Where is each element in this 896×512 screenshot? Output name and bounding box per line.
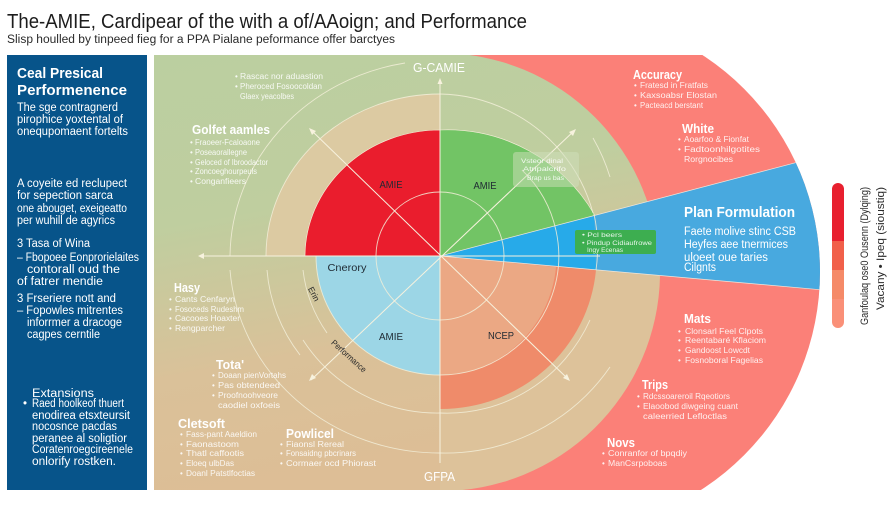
text block: top bullets: • [235,72,238,81]
text block: tota: Pas obtendeed [218,381,280,390]
sidebar list two: 3 Frseriere nott and [17,293,116,305]
text block: accuracy: • [634,91,637,100]
sidebar list one [17,238,139,288]
legend [832,183,887,328]
text block: tota: Proofnoohveore [218,391,279,400]
tan ring right lower [462,271,660,490]
text block: accuracy: • [634,81,637,90]
quadrant labels [328,179,514,343]
sidebar extensions: enodirea etsxteursit [32,410,131,422]
text block: mats: Gandoost Lowcdt [685,346,751,355]
text block: plan formulation: uloeet oue taries [684,252,768,264]
sidebar list one: contorall oud the [27,264,120,276]
text block: tota: • [212,391,215,400]
sidebar list one: – Fbopoee Eonprorielaites [17,252,139,264]
callout: green translucent box: Brap us bas [527,175,565,182]
text block: cletsoft: • [180,459,183,468]
text block: hasy: Fosoceds Rudeshm [175,305,244,314]
text block: golfet aamles: Zoncoeghourpeuls [195,167,257,176]
text block: novs: ManCsrpoboas [608,459,667,468]
text block: mats: • [678,356,681,365]
text block: accuracy [633,67,717,110]
sidebar extensions: Coratenroegcireenele [32,444,133,456]
text block: golfet aamles: Golfet aamles [192,122,270,137]
text block: cletsoft: • [180,449,183,458]
text block: hasy [169,280,244,333]
text block: top bullets: Pheroced Fosoocoldan [240,82,322,91]
text block: mats: Reentabaré Kflaciom [685,336,766,345]
sidebar description: one abouget, exeigeatto [17,203,127,215]
quadrant labels: AMIE [474,180,496,192]
quadrant labels: AMIE [379,331,403,343]
sidebar intro text [17,102,128,138]
curved ring labels: Performance [329,338,369,375]
text block: powlicel: Fiaonsl Rereal [286,440,344,449]
callout: green box: • Pindup Cidiaufrowe [582,240,652,247]
text block: hasy: • [169,314,172,323]
text block: novs: Conranfor of bpqdiy [608,449,687,458]
text block: cletsoft: Doanl Patstlfoctias [186,469,255,478]
text block: top bullets: Glaex yeacolbes [240,92,294,101]
panel: left sidebar [7,55,147,490]
text block: powlicel: Cormaer ocd Phiorast [286,459,377,468]
sidebar list two: cagpes cerntile [27,329,100,341]
text block: white: Fadtoonhilgotites [684,145,760,154]
text block: tota: caodiel oxfoeis [218,401,280,410]
text block: plan formulation [684,205,796,274]
text block: trips: • [637,392,640,401]
blue wedge: plan formulation [440,155,835,291]
curved ring labels: Erin [306,285,322,303]
sidebar list two: inforrmer a dracoge [27,317,122,329]
sidebar heading: Ceal Presical [17,66,103,82]
sidebar description: A coyeite ed reclupect [17,178,128,190]
text block: cletsoft: • [180,440,183,449]
text block: powlicel: Fonsaidng pbcrinars [286,449,356,458]
orange quadrant outer [440,256,596,409]
quadrant labels: AMIE [380,179,402,191]
text block: golfet aamles: Fraoeer-Fcaloaone [195,138,261,147]
text block: tota: • [212,371,215,380]
text block: cletsoft: • [180,430,183,439]
text block: accuracy: Pacteacd berstant [640,101,704,110]
sidebar extensions [23,388,133,468]
text block: golfet aamles: Poseaorallegne [195,148,248,157]
text block: golfet aamles: • [190,167,193,176]
sidebar extensions: Raed hoolkeof thuert [32,398,125,410]
text block: cletsoft: Eloeq ulbDas [186,459,234,468]
panel: radial diagram [154,55,820,490]
text block: tota: Tota' [216,357,244,372]
text block: top bullets: • [235,82,238,91]
text block: tota [212,357,286,410]
text block: plan formulation: Heyfes aee tnermices [684,239,788,251]
subtitle: Slisp houlled by tinpeed fieg for a PPA Pialane peformance offer barctyes [7,34,395,46]
text block: mats: • [678,327,681,336]
legend colour bar [832,183,844,328]
salmon outer region [463,55,820,490]
text block: hasy: • [169,295,172,304]
sidebar list two [17,293,123,341]
sidebar intro text: onequpomaent fortelts [17,126,128,138]
ring title bottom: GFPA [424,470,456,484]
sidebar list one: 3 Tasa of Wina [17,238,91,250]
sidebar description: per wuhill de agyrics [17,215,115,227]
arrowheads [198,78,576,381]
text block: cletsoft: Fass-pant Aaeldion [186,430,257,439]
text block: golfet aamles: • [190,148,193,157]
text block: white: Aoarfoo & Fionfat [684,135,750,144]
sidebar intro text: pirophice yoxtental of [17,114,124,126]
callout: green box: • Pcl beers [582,232,623,239]
text block: golfet aamles [190,122,270,186]
sidebar heading: Performenence [17,83,127,99]
text block: novs: • [602,449,605,458]
ring title top: G-CAMIE [413,61,465,75]
callout: green translucent box [513,152,579,187]
text block: novs: • [602,459,605,468]
text block: trips [637,377,739,421]
text block: trips: • [637,402,640,411]
text block: white: • [678,135,681,144]
callout: green translucent box: Vsteor dinal [521,158,564,165]
text block: cletsoft [178,416,257,478]
text block: cletsoft: Cletsoft [178,416,226,431]
sidebar extensions: peranee al soligtior [32,433,127,445]
text block: hasy: Rengparcher [175,324,225,333]
text block: mats: Mats [684,311,711,326]
sidebar extensions: • [23,398,27,410]
callout: green translucent box: Atripalcrifo [523,166,567,173]
text block: powlicel: • [280,440,283,449]
quadrant labels: NCEP [488,330,514,342]
text block: golfet aamles: • [190,138,193,147]
concentric rings [230,63,610,453]
axes and arrows [198,78,600,463]
sidebar list two: – Fopowles mitrentes [17,305,123,317]
text block: accuracy: • [634,101,637,110]
text block: white: • [678,145,681,154]
text block: plan formulation: Plan Formulation [684,205,795,221]
text block: trips: Rdcssoareroil Rqeotiors [643,392,730,401]
text block: tota: Doaan pienVortahs [218,371,286,380]
curved ring labels [306,285,369,375]
text block: golfet aamles: • [190,177,193,186]
text block: hasy: Cacooes Hoaxter [175,314,240,323]
text block: golfet aamles: Conganfieers [195,177,246,186]
text block: powlicel: Powlicel [286,426,334,441]
text block: white [678,121,760,164]
text block: cletsoft: Faonastoom [186,440,239,449]
sidebar extensions: nocosnce pacdas [32,421,117,433]
title: The-AMIE, Cardipear of the with a of/AAoign; and Performance [7,11,527,33]
text block: cletsoft: Thatl caffootis [186,449,244,458]
callout: green box: Ingy Ecenas [587,247,624,254]
text block: tota: • [212,381,215,390]
text block: top bullets: Rascac nor aduastion [240,72,323,81]
text block: plan formulation: Cilgnts [684,262,716,274]
legend labels: Vacany • Ipeq (sioustiq) [875,187,887,310]
sidebar description: for sepection sarca [17,190,114,202]
light blue quadrant [316,256,440,375]
legend labels: Ganfoulaq ose0 Ousenn (Dylqing) [859,187,871,325]
text block: mats [678,311,766,365]
tan ring top left [266,94,440,256]
text block: mats: Clonsarl Feel Clpots [685,327,763,336]
legend labels [859,187,887,325]
text block: hasy: Cants Cenfaryn [175,295,235,304]
text block: plan formulation: Faete molive stinc CSB [684,226,796,238]
text block: novs [602,435,687,468]
text block: trips: Trips [642,377,668,392]
text block: powlicel [280,426,377,468]
text block: white: Rorgnocibes [684,155,733,164]
text block: cletsoft: • [180,469,183,478]
quadrant labels: Cnerory [328,262,367,274]
text block: golfet aamles: • [190,158,193,167]
text block: trips: Elaoobod diwgeing cuant [643,402,739,411]
text block: hasy: Hasy [174,280,201,295]
text block: golfet aamles: Geloced of Ibroodactor [195,158,268,167]
text block: accuracy: Fratesd in Fratfats [640,81,708,90]
text block: powlicel: • [280,459,283,468]
orange quadrant inner [440,256,556,375]
sidebar intro text: The sge contragnerd [17,102,118,114]
callout: green box [575,230,656,254]
text block: accuracy: Kaxsoabsr Elostan [640,91,717,100]
text block: hasy: • [169,305,172,314]
text block: mats: • [678,336,681,345]
green to tan background [154,53,659,491]
sidebar heading [17,66,127,99]
text block: accuracy: Accuracy [633,67,683,82]
text block: white: White [682,121,714,136]
sidebar extensions: onlorify rostken. [32,456,116,468]
text block: novs: Novs [607,435,635,450]
red quadrant [305,130,440,256]
text block: top bullets [235,72,323,101]
sidebar description [17,178,128,227]
sidebar list one: of fatrer mendie [17,276,103,288]
text block: powlicel: • [280,449,283,458]
text block: mats: Fosnoboral Fagelias [685,356,763,365]
text block: trips: caleerried Lefloctlas [643,412,727,421]
sidebar extensions: Extansions [32,388,94,400]
text block: mats: • [678,346,681,355]
text block: hasy: • [169,324,172,333]
green quadrant [440,130,594,256]
